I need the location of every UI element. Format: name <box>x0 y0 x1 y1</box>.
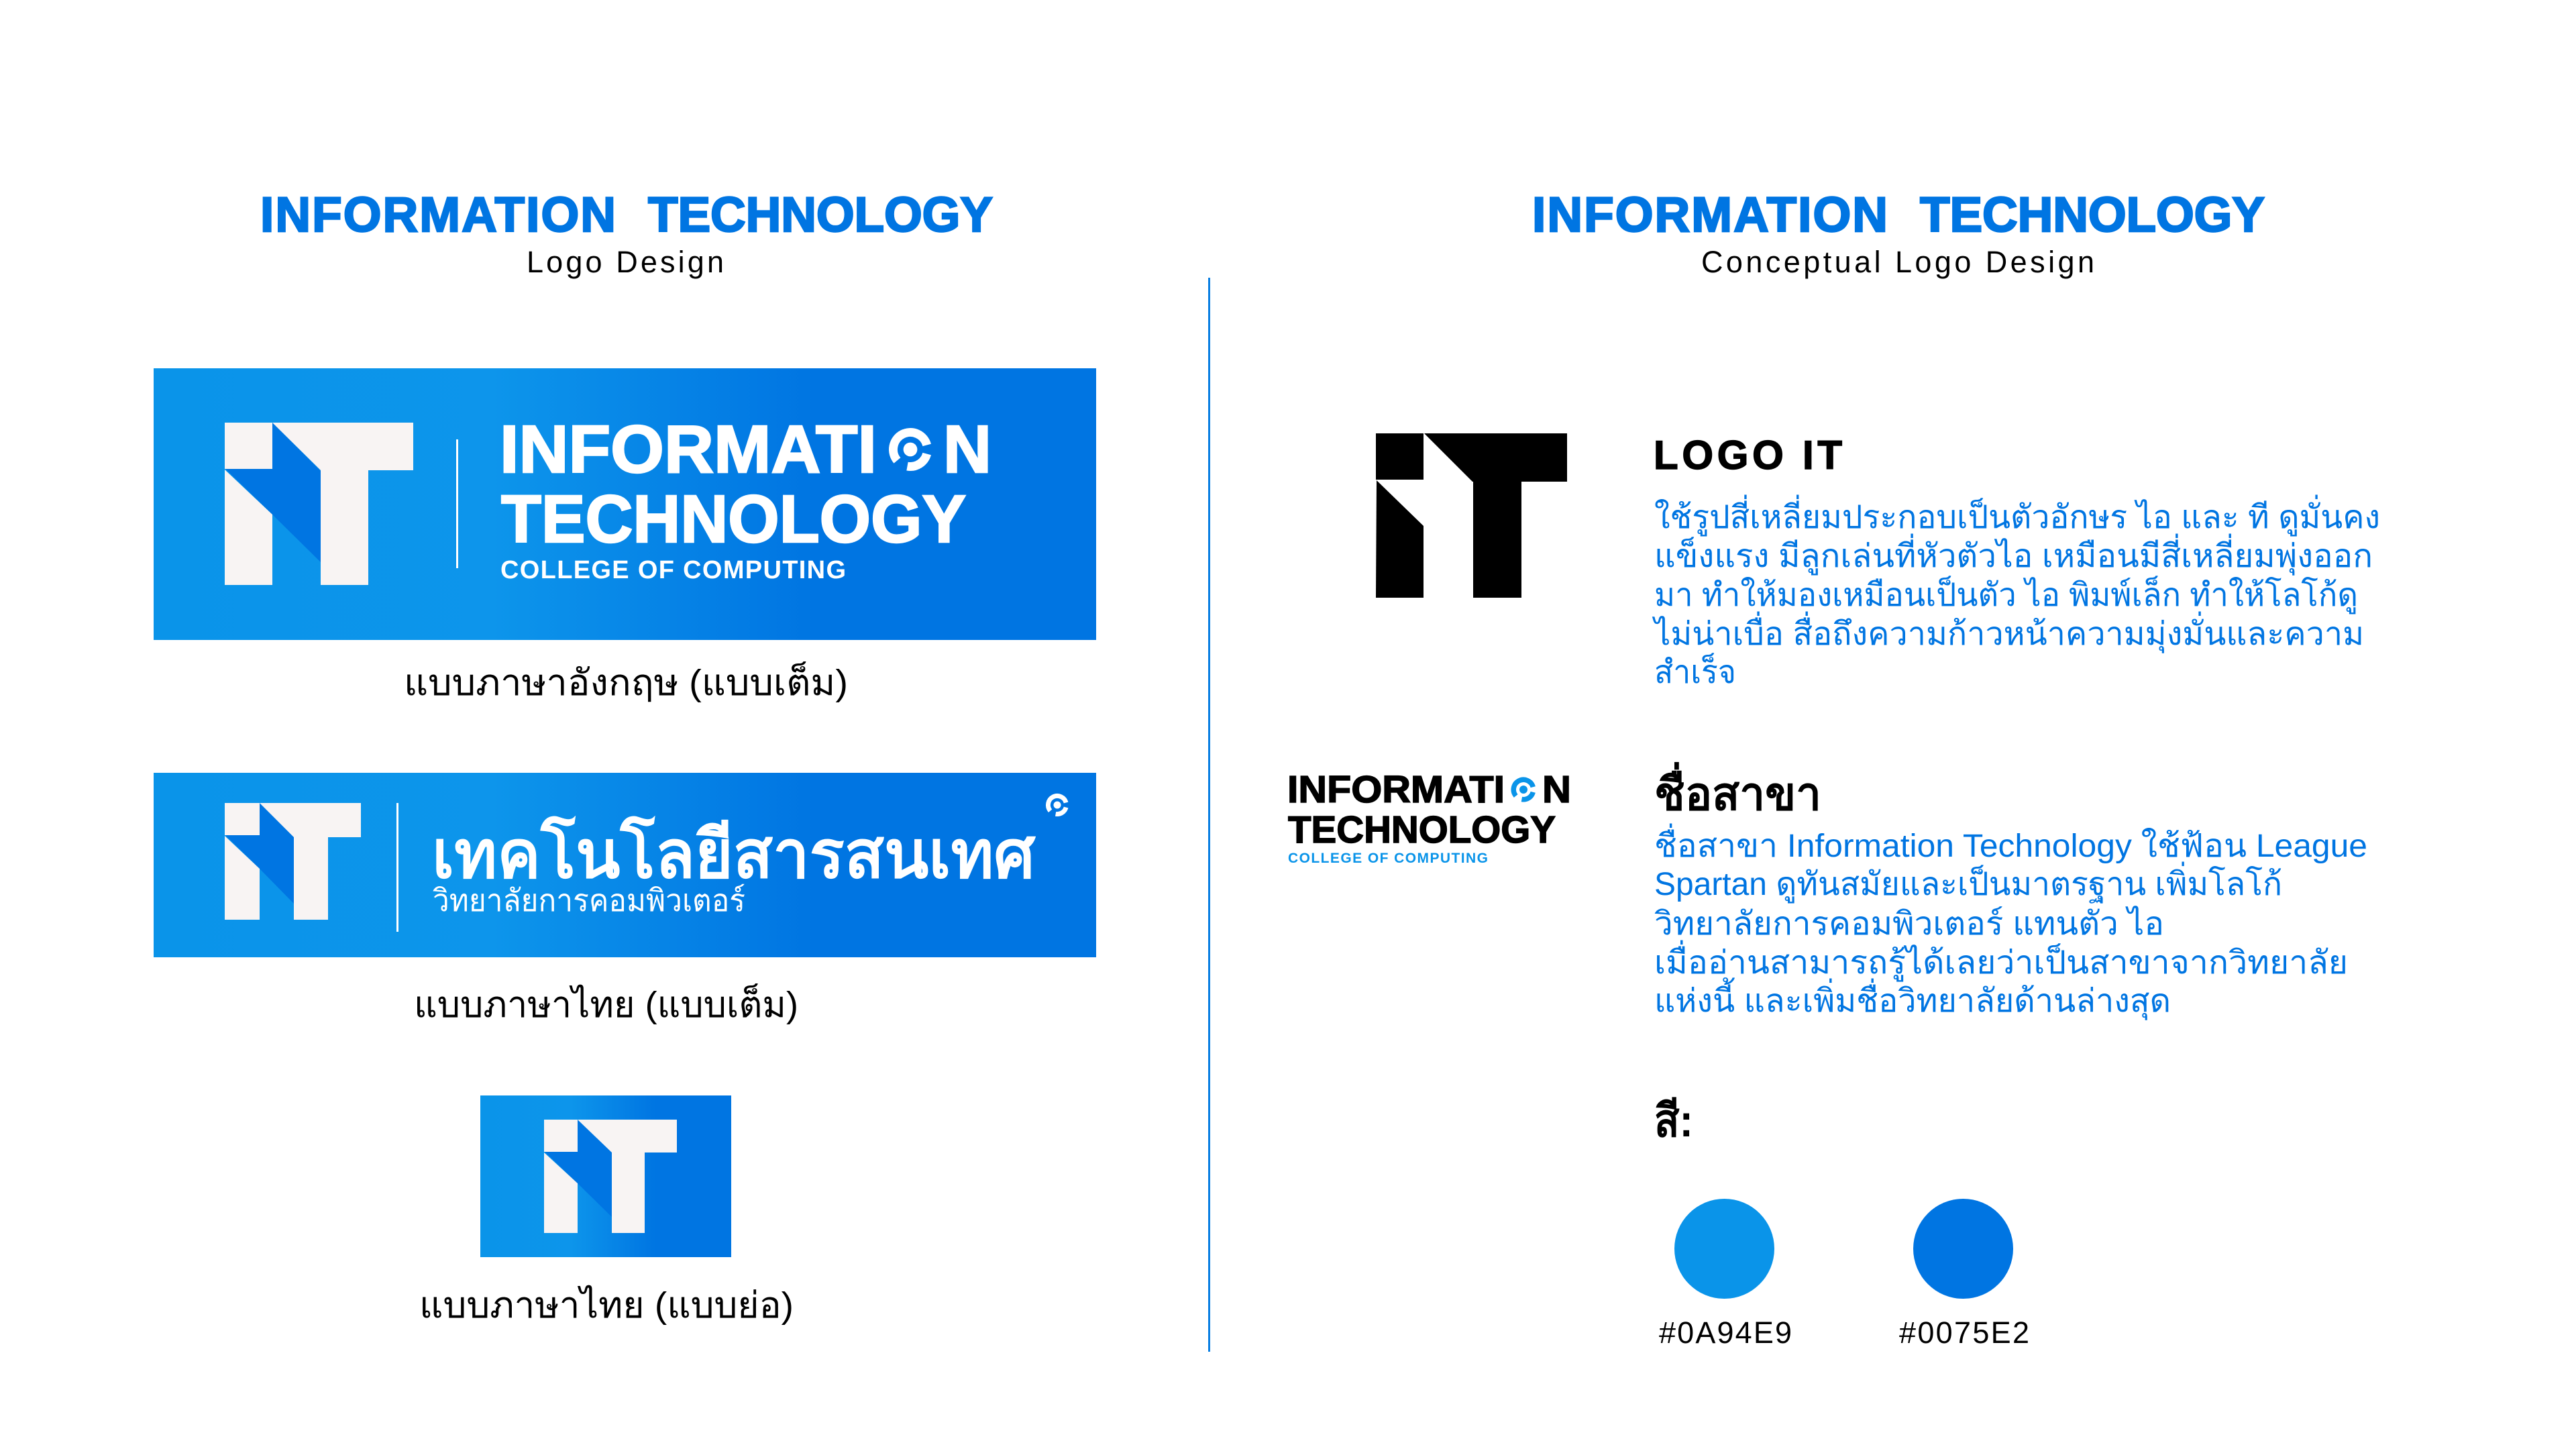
icon: ring O <box>893 433 927 466</box>
heading: branch name: ชื่อสาขา <box>1654 761 1821 820</box>
wordmark: black with blue ring <box>1287 768 1571 866</box>
caption: Thai short: แบบภาษาไทย (แบบย่อ) <box>419 1285 794 1326</box>
text block: logo description: แข็งแรง มีลูกเล่นที่หัวตัวไอ เหมือนมีสี่เหลี่ยมพุ่งออก <box>1654 533 2373 576</box>
heading: right title: INFORMATION <box>1532 188 1888 242</box>
text block: branch name description: วิทยาลัยการคอมพิวเตอร์ แทนตัว ไอ <box>1654 905 2164 942</box>
text block: logo description: ใช้รูปสี่เหลี่ยมประกอบเป็นตัวอักษร ไอ และ ที ดูมั่นคง <box>1654 494 2380 537</box>
text block: logo description <box>1652 494 2380 690</box>
text block: logo description: สำเร็จ <box>1654 653 1736 690</box>
swatch: dark blue: #0075E2 <box>1899 1316 2029 1350</box>
panel: Thai full logo banner <box>154 773 1096 957</box>
wordmark: Thai: วิทยาลัยการคอมพิวเตอร์ <box>433 883 745 918</box>
text block: branch name description: แห่งนี้ และเพิ่มชื่อวิทยาลัยด้านล่างสุด <box>1654 977 2171 1020</box>
text block: logo description: มา ทำให้มองเหมือนเป็นตัว ไอ พิมพ์เล็ก ทำให้โลโก้ดู <box>1654 576 2358 614</box>
heading: colors: สี: <box>1654 1095 1693 1146</box>
icon: IT logo white <box>225 423 413 585</box>
icon: IT logo white small <box>225 803 361 920</box>
wordmark: information technology: INFORMATI <box>500 412 877 487</box>
wordmark: information technology <box>500 412 991 584</box>
wordmark: black with blue ring: INFORMATI <box>1287 768 1505 811</box>
wordmark: information technology: COLLEGE OF COMPUTING <box>500 556 846 584</box>
swatch: dark blue <box>1899 1199 2029 1350</box>
text block: logo description: ไม่น่าเบื่อ สื่อถึงความก้าวหน้าความมุ่งมั่นและความ <box>1652 611 2364 653</box>
wordmark: black with blue ring: COLLEGE OF COMPUTING <box>1288 851 1488 866</box>
heading: left title <box>260 188 993 242</box>
subtitle: Conceptual Logo Design: Conceptual Logo Design <box>1701 245 2094 279</box>
text block: branch name description: ชื่อสาขา Information Technology ใช้ฟ้อน League <box>1654 823 2367 864</box>
heading: left title: INFORMATION <box>260 188 616 242</box>
panel: English full logo banner <box>154 368 1096 640</box>
wordmark: Thai: เทคโนโลยีสารสนเทศ <box>432 815 1036 892</box>
wordmark: information technology: TECHNOLOGY <box>501 482 966 557</box>
wordmark: black with blue ring: TECHNOLOGY <box>1288 808 1556 851</box>
text block: branch name description: Spartan ดูทันสมัยและเป็นมาตรฐาน เพิ่มโลโก้ <box>1654 861 2282 904</box>
heading: right title: TECHNOLOGY <box>1920 188 2265 242</box>
caption: Thai full: แบบภาษาไทย (แบบเต็ม) <box>414 983 798 1025</box>
icon: ring small <box>1048 796 1066 814</box>
swatch: light blue <box>1659 1199 1792 1350</box>
text block: branch name description: เมื่ออ่านสามารถรู้ได้เลยว่าเป็นสาขาจากวิทยาลัย <box>1654 940 2348 982</box>
heading: LOGO IT: LOGO IT <box>1654 433 1842 478</box>
icon: IT logo black <box>1376 433 1567 598</box>
wordmark: information technology: N <box>943 412 991 487</box>
caption: English full: แบบภาษาอังกฤษ (แบบเต็ม) <box>404 661 848 703</box>
subtitle: Logo Design: Logo Design <box>527 245 724 279</box>
heading: left title: TECHNOLOGY <box>648 188 993 242</box>
heading: right title <box>1532 188 2265 242</box>
wordmark: black with blue ring: N <box>1542 768 1571 811</box>
text block: branch name description <box>1654 823 2367 1020</box>
panel: Thai short logo banner <box>480 1095 731 1257</box>
swatch: light blue: #0A94E9 <box>1659 1316 1792 1350</box>
